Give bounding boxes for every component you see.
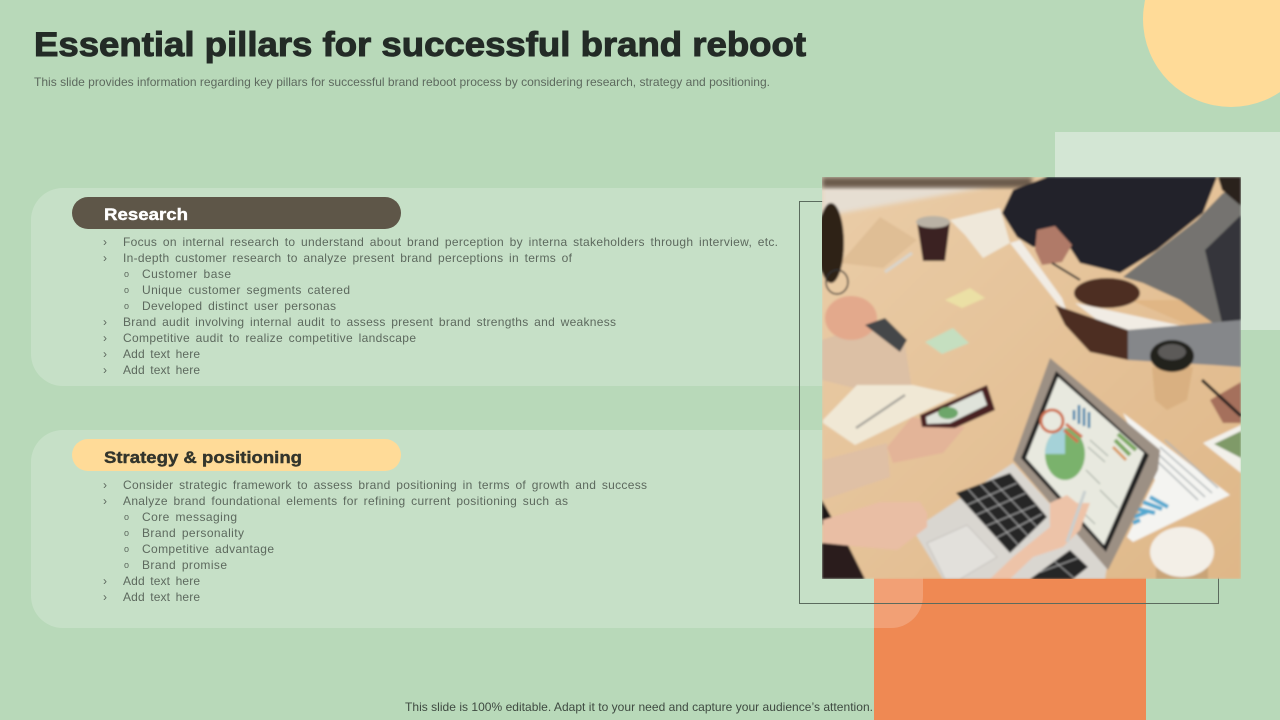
strategy bullet list: Consider strategic framework to assess brand positioning in terms of growth and success bbox=[123, 478, 647, 492]
decorative orange block bbox=[874, 570, 1146, 720]
research bullet list: Brand audit involving internal audit to assess present brand strengths and weakness bbox=[123, 315, 616, 329]
heading: research: Research bbox=[104, 205, 188, 224]
title: Essential pillars for successful brand reboot bbox=[34, 26, 806, 64]
strategy bullet list: › bbox=[103, 574, 107, 588]
research bullet list: Unique customer segments catered bbox=[142, 283, 350, 297]
strategy bullet list: Brand promise bbox=[142, 558, 227, 572]
research bullet list: o bbox=[124, 301, 129, 311]
photo: team meeting around a table with laptop bbox=[818, 177, 1241, 579]
research bullet list: › bbox=[103, 331, 107, 345]
research bullet list: Developed distinct user personas bbox=[142, 299, 336, 313]
strategy bullet list bbox=[103, 478, 647, 604]
research bullet list: › bbox=[103, 347, 107, 361]
heading: strategy and positioning: Strategy & positioning bbox=[104, 448, 302, 467]
strategy bullet list: Add text here bbox=[123, 590, 200, 604]
research bullet list bbox=[103, 235, 778, 377]
research bullet list: Add text here bbox=[123, 347, 200, 361]
research bullet list: › bbox=[103, 315, 107, 329]
research bullet list: › bbox=[103, 363, 107, 377]
strategy bullet list: › bbox=[103, 590, 107, 604]
research bullet list: Competitive audit to realize competitive landscape bbox=[123, 331, 416, 345]
research bullet list: Add text here bbox=[123, 363, 200, 377]
panel: research bbox=[31, 188, 923, 386]
strategy bullet list: Analyze brand foundational elements for refining current positioning such as bbox=[123, 494, 568, 508]
strategy bullet list: o bbox=[124, 544, 129, 554]
research bullet list: o bbox=[124, 269, 129, 279]
research bullet list: In-depth customer research to analyze present brand perceptions in terms of bbox=[123, 251, 573, 265]
strategy bullet list: Brand personality bbox=[142, 526, 244, 540]
panel: strategy and positioning bbox=[31, 430, 923, 628]
footer note: This slide is 100% editable. Adapt it to your need and capture your audience’s attention. bbox=[405, 700, 873, 714]
heading: strategy and positioning bbox=[72, 439, 401, 471]
subtitle: This slide provides information regarding key pillars for successful brand reboot process by considering research, strategy and positioning. bbox=[34, 75, 770, 89]
research bullet list: Focus on internal research to understand about brand perception by interna stakeholders through interview, etc. bbox=[123, 235, 778, 249]
research bullet list: Customer base bbox=[142, 267, 231, 281]
strategy bullet list: o bbox=[124, 560, 129, 570]
strategy bullet list: › bbox=[103, 494, 107, 508]
decorative light square bbox=[1055, 132, 1280, 330]
heading: research bbox=[72, 197, 401, 229]
strategy bullet list: › bbox=[103, 478, 107, 492]
strategy bullet list: Competitive advantage bbox=[142, 542, 274, 556]
research bullet list: › bbox=[103, 235, 107, 249]
research bullet list: o bbox=[124, 285, 129, 295]
strategy bullet list: Add text here bbox=[123, 574, 200, 588]
decorative circle bbox=[1143, 0, 1280, 107]
image frame outline bbox=[800, 202, 1218, 604]
strategy bullet list: o bbox=[124, 528, 129, 538]
strategy bullet list: Core messaging bbox=[142, 510, 237, 524]
strategy bullet list: o bbox=[124, 512, 129, 522]
research bullet list: › bbox=[103, 251, 107, 265]
